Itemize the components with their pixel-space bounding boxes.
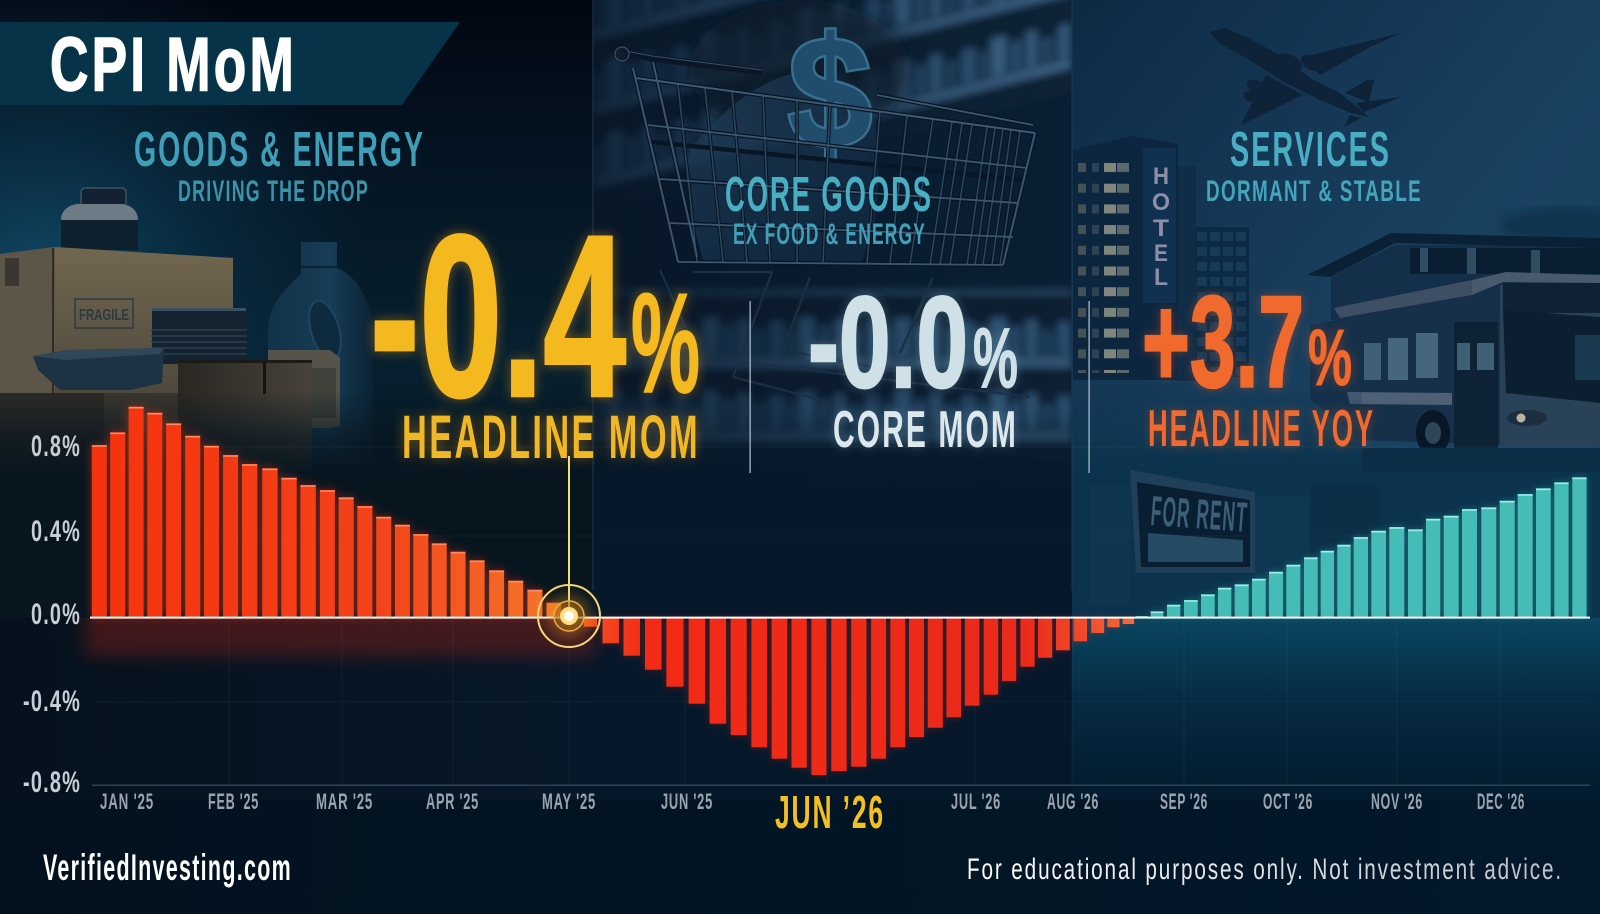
x axis labels <box>100 789 1525 814</box>
divider <box>1088 301 1090 473</box>
x axis labels: AUG '26 <box>1047 789 1099 814</box>
highlighted month label: JUN ’26 <box>775 786 885 838</box>
stat: core mom: % <box>973 312 1018 406</box>
icon: cart wire frame <box>615 47 1035 403</box>
chart background wash <box>74 618 1600 914</box>
label: hotel sign: O <box>1152 189 1170 216</box>
y axis labels: -0.4% <box>23 685 81 718</box>
chart: cpi mom bars <box>90 407 1590 786</box>
stat: core mom: CORE MOM <box>833 401 1018 459</box>
icon: dollar sign: $ <box>788 5 872 181</box>
x axis labels: FEB '25 <box>208 789 259 814</box>
x axis labels: MAY '25 <box>542 789 596 814</box>
icon: jug <box>61 188 138 250</box>
x axis labels: JUN '25 <box>661 789 713 814</box>
icon: detergent bottle <box>268 242 373 464</box>
chart: negative red bars <box>584 618 1134 775</box>
label: hotel sign <box>1152 163 1170 291</box>
heading: services <box>1206 123 1422 208</box>
y axis labels <box>23 430 81 799</box>
x axis labels: JAN '25 <box>100 789 154 814</box>
label: hotel sign: T <box>1153 215 1169 242</box>
icon: shopping cart with dollar sign <box>615 5 1035 403</box>
y axis labels: 0.0% <box>31 598 81 631</box>
icon: bus <box>1310 272 1600 456</box>
icon: airplane silhouette <box>1210 28 1401 127</box>
panel: lower fade over photos <box>0 380 1600 640</box>
stat: headline yoy: HEADLINE YOY <box>1148 400 1375 458</box>
x axis labels: APR '25 <box>426 789 479 814</box>
stat: headline mom: HEADLINE MOM <box>402 403 700 471</box>
stat: headline yoy: +3.7 <box>1142 268 1304 414</box>
panel: core goods shelves background <box>594 0 1072 466</box>
y axis labels: 0.8% <box>31 430 81 463</box>
heading: core goods <box>725 168 933 251</box>
heading: goods and energy <box>134 123 425 208</box>
glow under positive red bars <box>76 618 604 665</box>
icon: large cardboard box <box>0 247 233 400</box>
label: hotel sign: E <box>1154 240 1168 267</box>
x axis labels: SEP '26 <box>1160 789 1208 814</box>
chart: positive red bars <box>92 407 561 617</box>
heading: core goods: EX FOOD & ENERGY <box>733 218 926 251</box>
chart: bottom axis line <box>92 784 1590 786</box>
label: hotel sign: L <box>1154 264 1168 291</box>
panel: goods and energy background <box>0 0 593 640</box>
x axis labels: OCT '26 <box>1263 789 1313 814</box>
icon: for rent sign and buildings: FOR RENT <box>1149 487 1249 541</box>
chart: zero baseline <box>90 617 1590 619</box>
label: fragile: FRAGILE <box>79 307 129 324</box>
icon: food tray <box>33 348 164 390</box>
callout: marker ring at zero crossing <box>538 456 600 647</box>
x axis labels: DEC '26 <box>1477 789 1525 814</box>
stat: headline mom: -0.4 <box>370 188 626 444</box>
heading: services: DORMANT & STABLE <box>1206 175 1422 208</box>
icon: small box <box>178 360 312 470</box>
label: hotel sign: H <box>1153 163 1169 190</box>
y axis labels: 0.4% <box>31 515 81 548</box>
x axis labels: JUL '26 <box>951 789 1001 814</box>
x axis labels: MAR '25 <box>316 789 373 814</box>
brand footer: VerifiedInvesting.com <box>43 847 292 888</box>
chart: positive teal bars <box>1136 477 1587 617</box>
heading: goods and energy: GOODS & ENERGY <box>134 123 425 177</box>
x axis labels: NOV '26 <box>1371 789 1423 814</box>
title banner <box>0 22 460 108</box>
stat: headline yoy: % <box>1308 313 1352 402</box>
stat: headline mom: % <box>631 264 700 423</box>
panel dividers <box>593 0 1072 590</box>
icon: lower boxes <box>0 393 182 480</box>
icon: tin stack <box>151 308 247 364</box>
heading: core goods: CORE GOODS <box>725 168 933 222</box>
grid lines <box>92 447 1590 785</box>
icon: stacked goods, boxes, jug and bottle <box>0 188 373 480</box>
stat: core mom: -0.0 <box>808 269 968 415</box>
icon: cart bag <box>687 74 878 262</box>
y axis labels: -0.8% <box>23 766 81 799</box>
heading: services: SERVICES <box>1230 123 1391 177</box>
icon: building behind bus <box>1307 233 1600 320</box>
divider <box>750 301 751 473</box>
heading: goods and energy: DRIVING THE DROP <box>178 175 369 208</box>
icon: for rent sign and buildings <box>1090 470 1380 605</box>
panel: services sky background <box>1072 0 1600 459</box>
label: fragile <box>75 299 133 328</box>
icon: hotel building <box>1073 136 1249 381</box>
title: CPI MoM <box>50 22 297 108</box>
